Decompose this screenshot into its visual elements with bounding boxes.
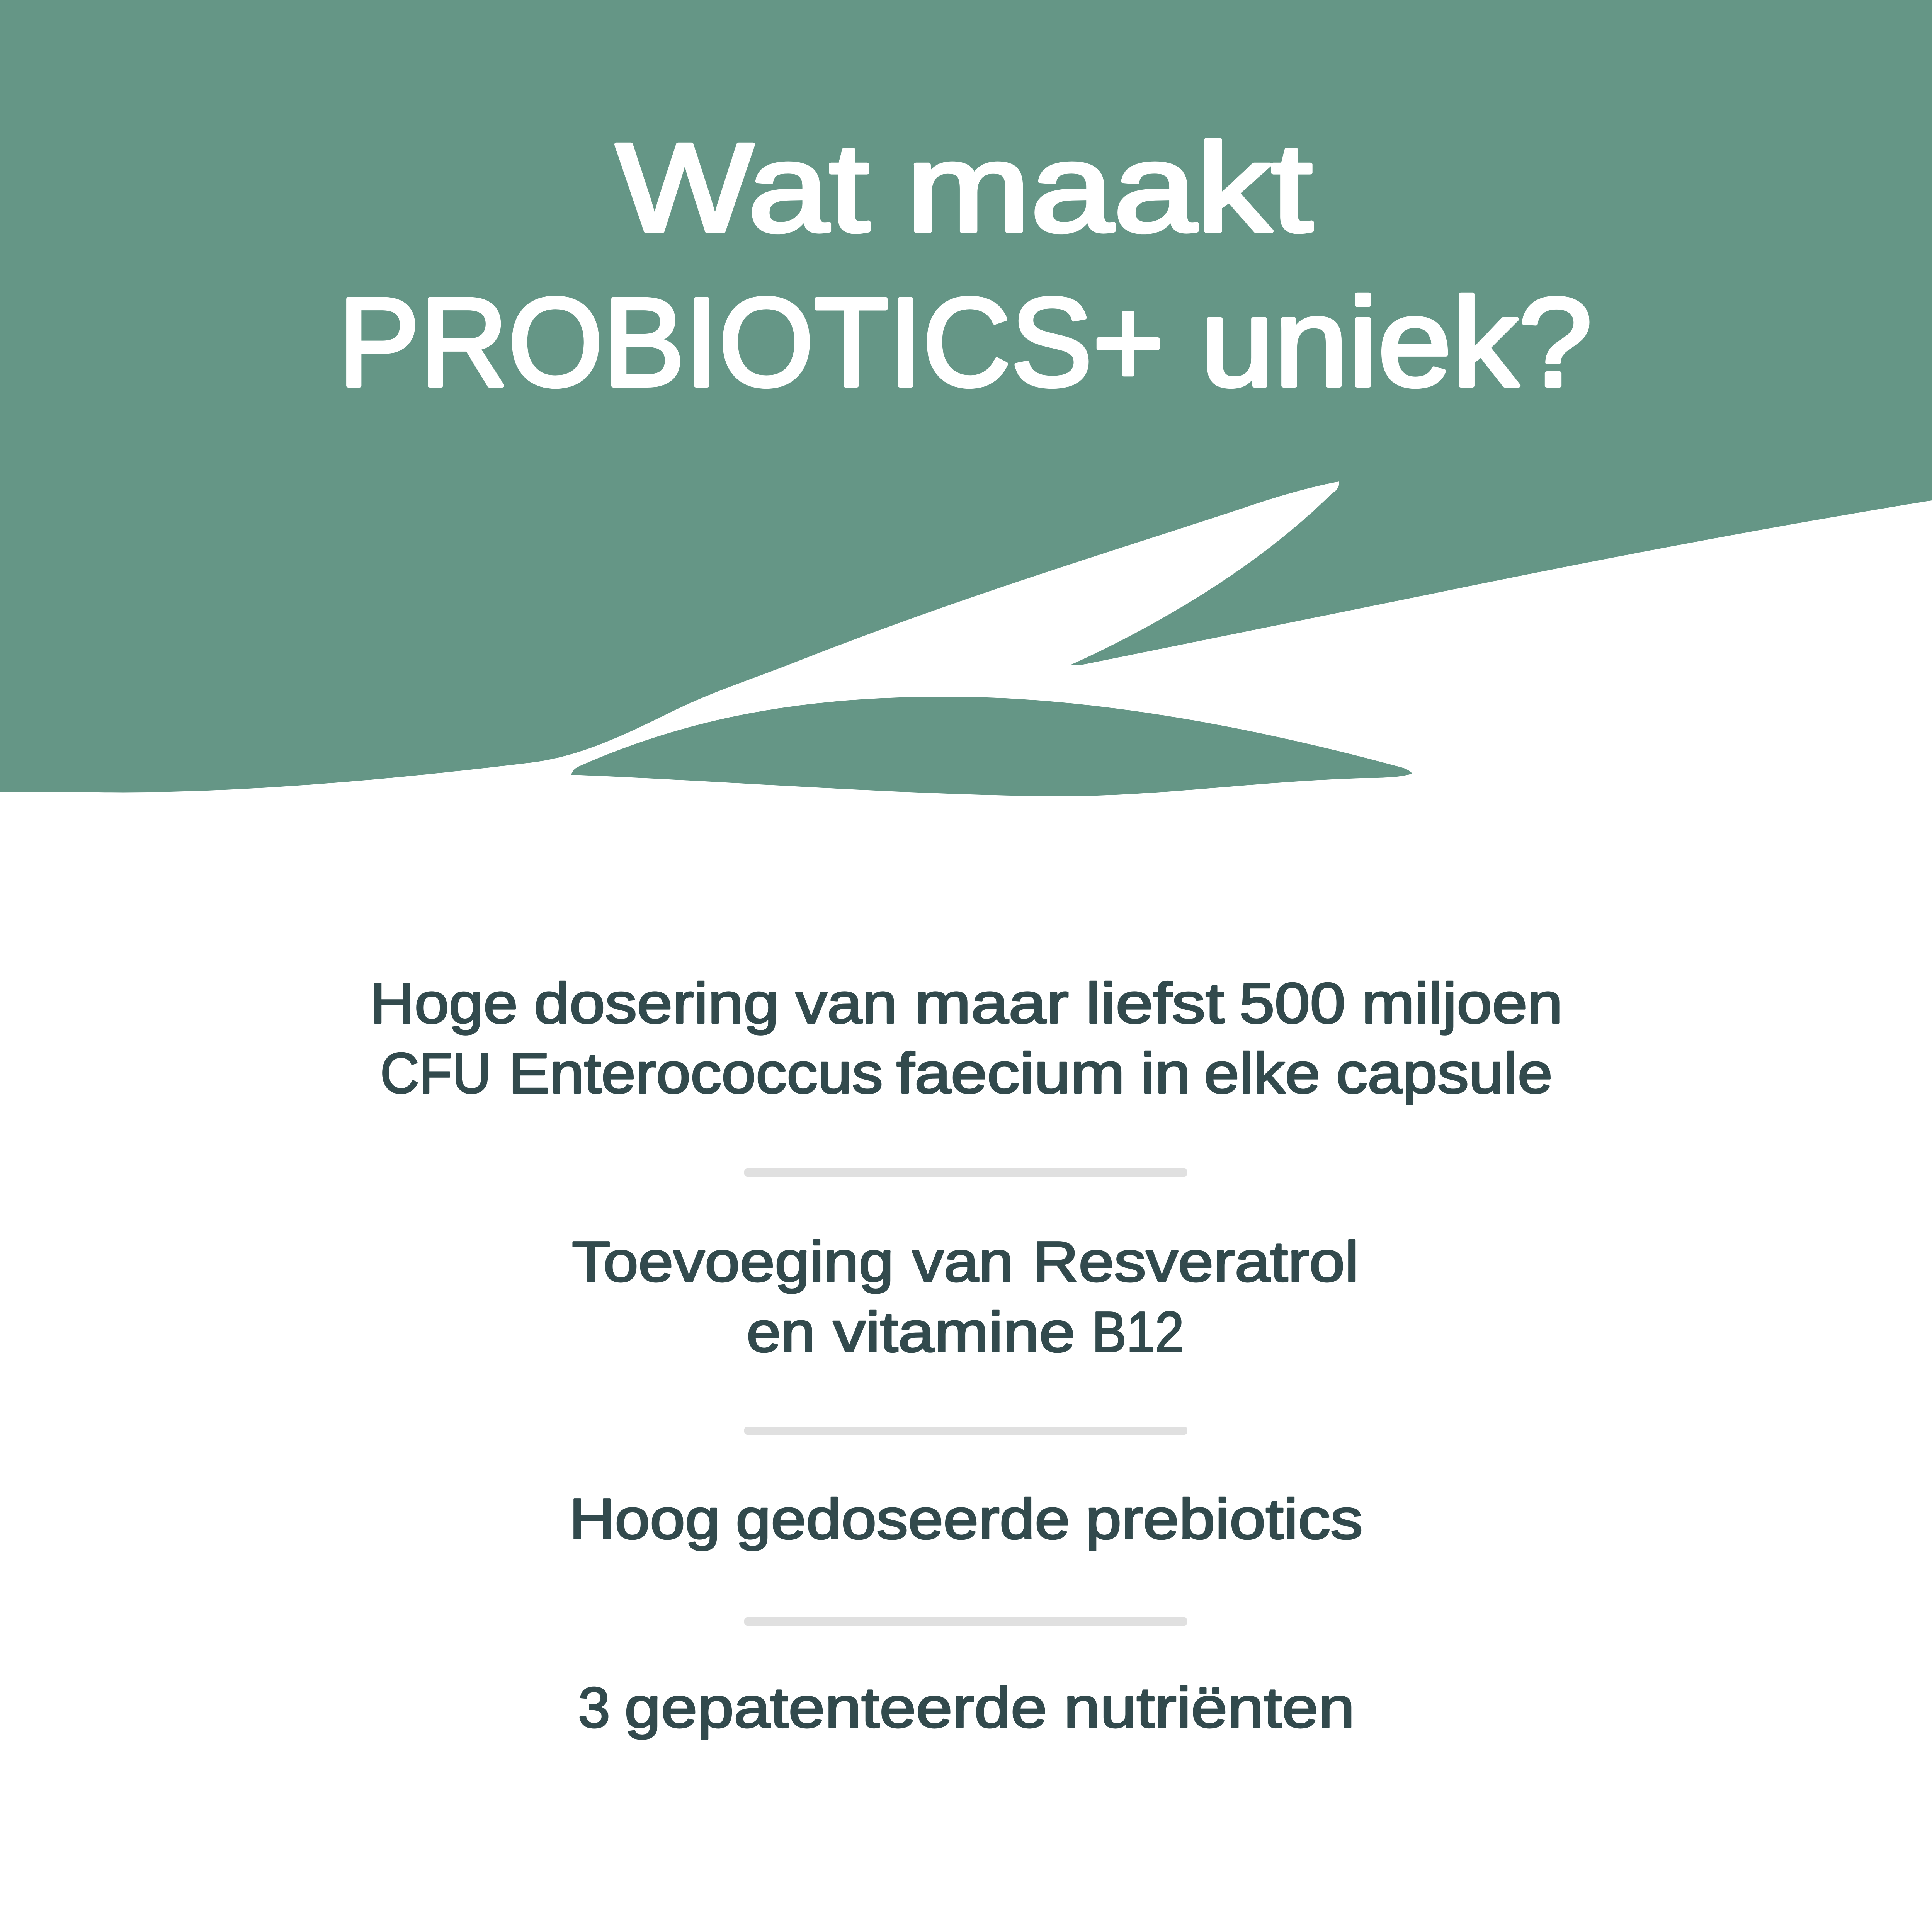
divider 2 [744, 1427, 1187, 1435]
text block: resveratrol and B12: B12 [1092, 1300, 1184, 1364]
text block: high dosage: Hoge [370, 971, 518, 1035]
text block: high dosage: maar [915, 971, 1069, 1035]
divider 3 [744, 1617, 1187, 1626]
text block: high dosage: Enterococcus [509, 1041, 883, 1105]
text block: resveratrol and B12: Toevoeging [572, 1230, 894, 1294]
text block: patented nutrients: nutriënten [1064, 1676, 1355, 1740]
text block: patented nutrients: 3 [578, 1676, 610, 1740]
text block: high dosage [370, 971, 1563, 1105]
text block: high dosage: elke [1204, 1041, 1320, 1105]
text block: high dosage: liefst [1086, 971, 1224, 1035]
text block: high dosage: in [1141, 1041, 1190, 1105]
text block: high dosage: dosering [534, 971, 779, 1035]
text block: prebiotics: Hoog [569, 1487, 720, 1551]
text block: resveratrol and B12: vitamine [833, 1300, 1075, 1364]
title line 2: uniek? [1200, 272, 1592, 413]
header background shape [0, 0, 1932, 792]
text block: patented nutrients: gepatenteerde [624, 1676, 1047, 1740]
text block: prebiotics: gedoseerde [736, 1487, 1070, 1551]
title line 1: maakt [906, 117, 1313, 258]
text block: resveratrol and B12: Resveratrol [1032, 1230, 1359, 1294]
title line 1: Wat [616, 117, 870, 258]
leaf shape below the header [571, 697, 1412, 796]
title line 2: PROBIOTICS+ [338, 272, 1164, 413]
text block: high dosage: capsule [1336, 1041, 1553, 1105]
panel: green header with leaf-shaped cut [0, 0, 1932, 796]
text block: high dosage: faecium [896, 1041, 1125, 1105]
text block: resveratrol and B12 [572, 1230, 1359, 1364]
text block: high dosage: miljoen [1362, 971, 1563, 1035]
text block: high dosage: 500 [1239, 971, 1345, 1035]
text block: high dosage: van [796, 971, 897, 1035]
text block: resveratrol and B12: en [747, 1300, 815, 1364]
text block: prebiotics: prebiotics [1085, 1487, 1363, 1551]
title [338, 117, 1592, 413]
text block: high dosage: CFU [380, 1041, 491, 1105]
text block: resveratrol and B12: van [912, 1230, 1014, 1294]
divider 1 [744, 1168, 1187, 1177]
